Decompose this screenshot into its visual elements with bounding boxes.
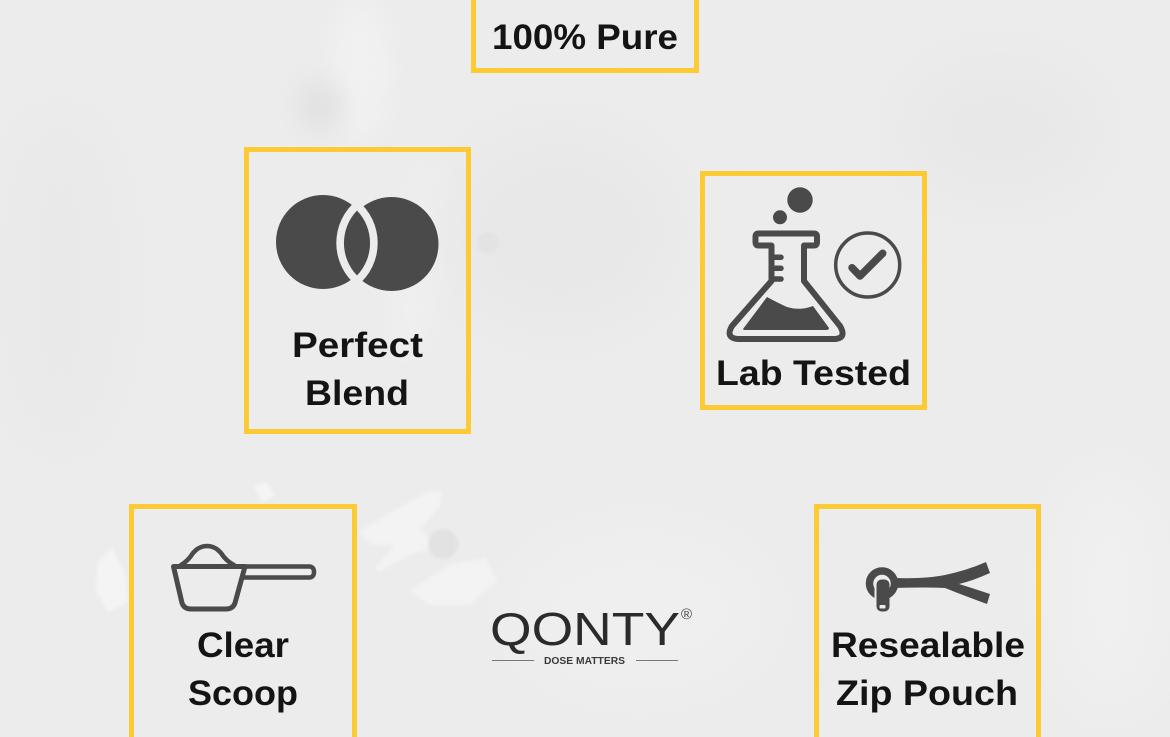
logo: Qonty: ® bbox=[681, 606, 692, 623]
icon: overlapping circles bbox=[276, 195, 438, 291]
icon: flask with check mark bbox=[730, 187, 900, 339]
logo: Qonty: QONTY bbox=[490, 603, 680, 655]
label: Perfect Blend bbox=[292, 326, 423, 413]
label: 100% Pure: 100% Pure bbox=[492, 18, 678, 57]
logo: Qonty: DOSE MATTERS bbox=[544, 655, 625, 667]
label: Clear Scoop: Scoop bbox=[188, 674, 298, 713]
logo: Qonty bbox=[490, 603, 692, 667]
panel: Clear Scoop bbox=[132, 506, 354, 737]
panel: 100% Pure bbox=[474, 0, 696, 70]
panel: Resealable Zip Pouch bbox=[816, 506, 1038, 737]
icon: zipper bbox=[870, 562, 990, 612]
label: Perfect Blend: Perfect bbox=[292, 326, 423, 365]
label: Resealable Zip Pouch bbox=[831, 626, 1025, 713]
icon: scoop bbox=[174, 546, 314, 609]
label: Perfect Blend: Blend bbox=[305, 374, 409, 413]
label: Resealable Zip Pouch: Zip Pouch bbox=[836, 674, 1018, 713]
paper background bbox=[98, 484, 456, 608]
panel: Perfect Blend bbox=[246, 150, 468, 432]
panel: Lab Tested bbox=[702, 174, 924, 408]
label: Resealable Zip Pouch: Resealable bbox=[831, 626, 1025, 665]
label: Lab Tested: Lab Tested bbox=[716, 354, 911, 393]
label: Clear Scoop: Clear bbox=[197, 626, 289, 665]
label: Clear Scoop bbox=[188, 626, 298, 713]
